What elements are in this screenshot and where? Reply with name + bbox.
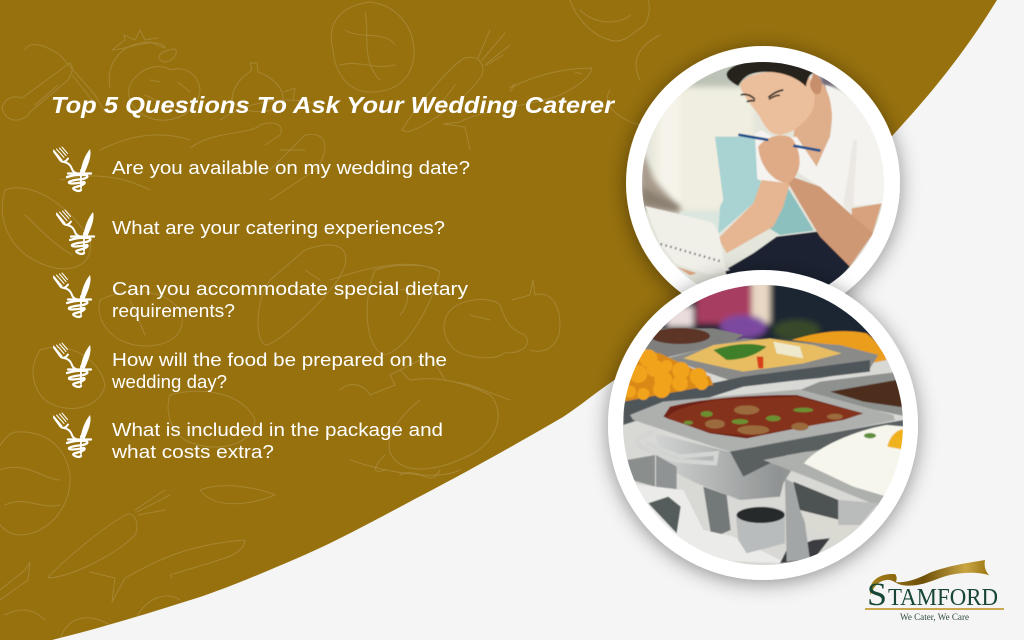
logo wordmark xyxy=(867,577,998,613)
back-centre tray xyxy=(667,338,878,385)
cushion xyxy=(715,137,763,233)
orange croquettes tray xyxy=(623,350,713,402)
icon: fork and knife xyxy=(54,273,91,317)
question 3 text: Can you accommodate special dietary xyxy=(112,278,469,299)
man's neck xyxy=(793,83,833,167)
icon: fork and knife xyxy=(56,210,94,254)
question 1 text: Are you available on my wedding date? xyxy=(112,157,470,178)
question 5 text: What is included in the package and xyxy=(112,419,443,440)
question 1 xyxy=(54,147,470,191)
man's forearm xyxy=(788,177,873,267)
question 4 text xyxy=(111,349,447,392)
logo swoosh xyxy=(869,560,989,595)
back-left tray xyxy=(643,328,743,358)
title: Top 5 Questions To Ask Your Wedding Caterer xyxy=(51,92,616,118)
tray rails xyxy=(623,360,870,425)
dish handle xyxy=(669,450,720,466)
rice xyxy=(804,425,905,497)
right chafing dish with rice xyxy=(764,451,884,506)
pencil xyxy=(738,135,821,151)
salad xyxy=(683,338,842,372)
man's trousers xyxy=(725,232,850,287)
icon: fork and knife xyxy=(54,147,91,191)
right tray with dark food xyxy=(800,372,907,417)
icon: fork and knife xyxy=(54,343,91,387)
main stew tray xyxy=(630,389,897,452)
man's fist xyxy=(758,135,800,183)
logo wordmark: S xyxy=(867,577,887,613)
notebook xyxy=(645,206,730,275)
logo rule xyxy=(865,608,1004,610)
man's shirt xyxy=(755,85,885,213)
question 3 xyxy=(54,273,469,321)
question 4 text: wedding day? xyxy=(111,371,227,392)
question 5 text: what costs extra? xyxy=(111,441,274,462)
man's left arm xyxy=(718,180,790,253)
question 2 xyxy=(56,210,445,254)
question 4 text: How will the food be prepared on the xyxy=(112,349,447,370)
question 3 text: requirements? xyxy=(112,300,235,321)
man's hair xyxy=(727,60,817,87)
photo circle: man thinking with notebook xyxy=(626,46,900,320)
chafing dish body xyxy=(655,418,905,500)
logo tagline: We Cater, We Care xyxy=(900,613,969,623)
man's face xyxy=(740,71,815,135)
food doodle pattern xyxy=(0,0,660,640)
question list xyxy=(54,147,470,462)
Stamford logo xyxy=(865,560,1004,623)
question 5 text xyxy=(111,419,443,462)
question 5 xyxy=(54,413,443,462)
logo wordmark: TAMFORD xyxy=(888,585,998,611)
orange garnish xyxy=(792,331,887,363)
question 3 text xyxy=(112,278,469,321)
icon: fork and knife xyxy=(54,413,91,457)
table cloth and burner xyxy=(636,484,782,563)
question 2 text: What are your catering experiences? xyxy=(112,217,445,238)
man's right upper arm xyxy=(851,203,882,237)
photo circle: buffet chafing dishes xyxy=(608,270,918,580)
dish legs xyxy=(656,455,678,490)
question 4 xyxy=(54,343,447,392)
blurred backdrop xyxy=(661,285,878,346)
